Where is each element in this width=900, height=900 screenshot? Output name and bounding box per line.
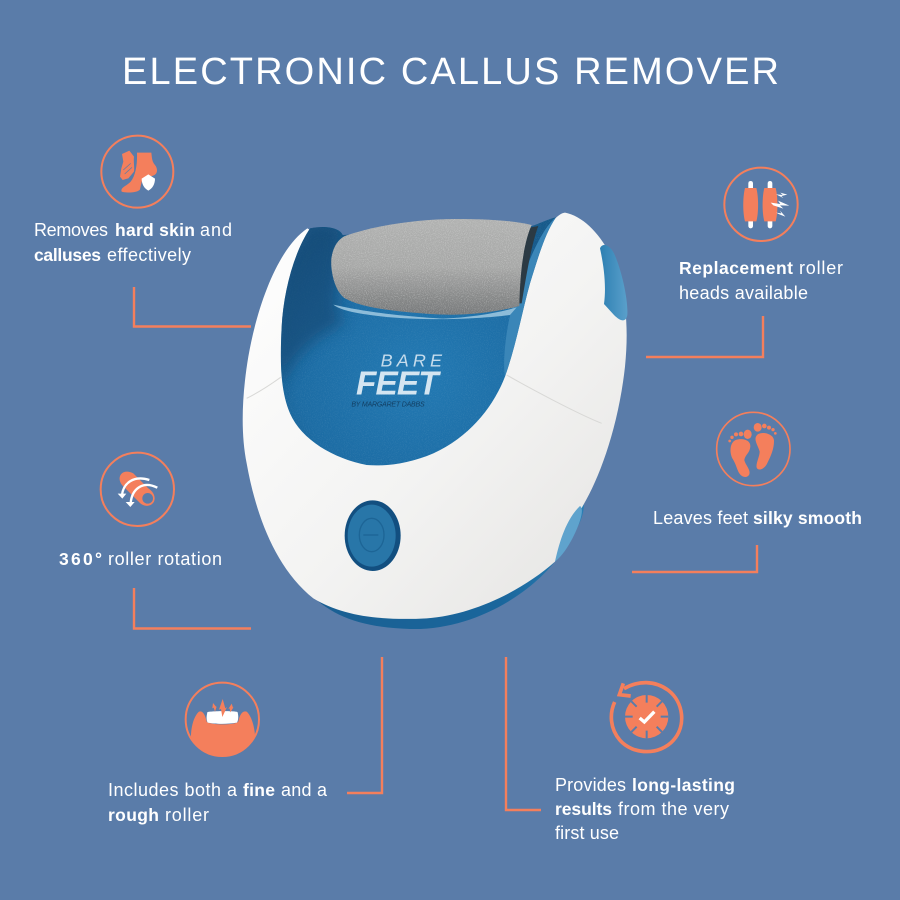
- text: removes hard skin: hard skin: [115, 220, 195, 240]
- text: replacement heads: [679, 258, 843, 303]
- cavity shaded left wall: [280, 227, 346, 383]
- text: fine and rough roller: and a: [281, 780, 328, 800]
- text: long-lasting results: Provides: [555, 775, 626, 795]
- text: fine and rough roller: Includes both a: [108, 780, 238, 800]
- text: silky smooth: silky smooth: [753, 508, 862, 528]
- logo: FEET: [356, 366, 441, 403]
- connector: hard skin: [134, 287, 251, 326]
- blue roller cavity: [273, 213, 563, 473]
- product: electronic callus remover device: [243, 213, 627, 629]
- side release button: [600, 245, 627, 320]
- text: removes hard skin: calluses: [34, 245, 101, 265]
- text: replacement heads: Replacement: [679, 258, 793, 278]
- connector: replacement heads: [646, 316, 763, 357]
- logo: BY MARGARET DABBS: [351, 402, 425, 409]
- abrasive roller: [331, 219, 532, 315]
- text: removes hard skin: and: [200, 220, 232, 240]
- seam lines: [247, 375, 602, 423]
- side light accent: [555, 506, 582, 562]
- icon: footprints: [717, 412, 790, 486]
- text: 360 rotation: [59, 549, 222, 569]
- text: fine and rough roller: [108, 780, 328, 825]
- text: fine and rough roller: roller: [165, 805, 209, 825]
- text: 360 rotation: 360°: [59, 549, 102, 569]
- title: ELECTRONIC CALLUS REMOVER: [122, 51, 779, 93]
- text: long-lasting results: results: [555, 799, 612, 819]
- text: removes hard skin: [34, 220, 232, 265]
- connector lines: [134, 287, 763, 810]
- device white body: [243, 213, 627, 619]
- text: silky smooth: Leaves feet: [653, 508, 748, 528]
- roller lower lip: [333, 305, 517, 319]
- text: 360 rotation: roller rotation: [108, 549, 222, 569]
- cavity lighter right rim: [504, 217, 556, 377]
- roller axle: [517, 226, 538, 303]
- connector: rollers: [347, 657, 382, 793]
- connector: silky smooth: [632, 545, 757, 572]
- text: fine and rough roller: rough: [108, 805, 159, 825]
- text: removes hard skin: effectively: [107, 245, 191, 265]
- logo: [351, 351, 443, 409]
- icon: foot with hand and shield: [101, 136, 173, 208]
- icon: roller rotation: [101, 453, 174, 526]
- text: replacement heads: heads available: [679, 283, 808, 303]
- power button: [345, 500, 401, 571]
- connector: rotation: [134, 588, 251, 628]
- text: long-lasting results: first use: [555, 823, 619, 843]
- icon: two rollers with sparks: [724, 168, 798, 241]
- text: fine and rough roller: fine: [243, 780, 275, 800]
- text: silky smooth: [653, 508, 862, 528]
- text: removes hard skin: Removes: [34, 220, 108, 240]
- logo: BARE: [381, 351, 443, 371]
- connector: long-lasting: [506, 657, 541, 810]
- icon: device head with rollers: [186, 683, 259, 756]
- device bottom blue band: [307, 505, 584, 629]
- text: long-lasting results: from the very: [618, 799, 729, 819]
- text: long-lasting results: [555, 775, 735, 843]
- text: long-lasting results: long-lasting: [632, 775, 735, 795]
- text: replacement heads: roller: [799, 258, 843, 278]
- icon: long-lasting results: [611, 683, 682, 752]
